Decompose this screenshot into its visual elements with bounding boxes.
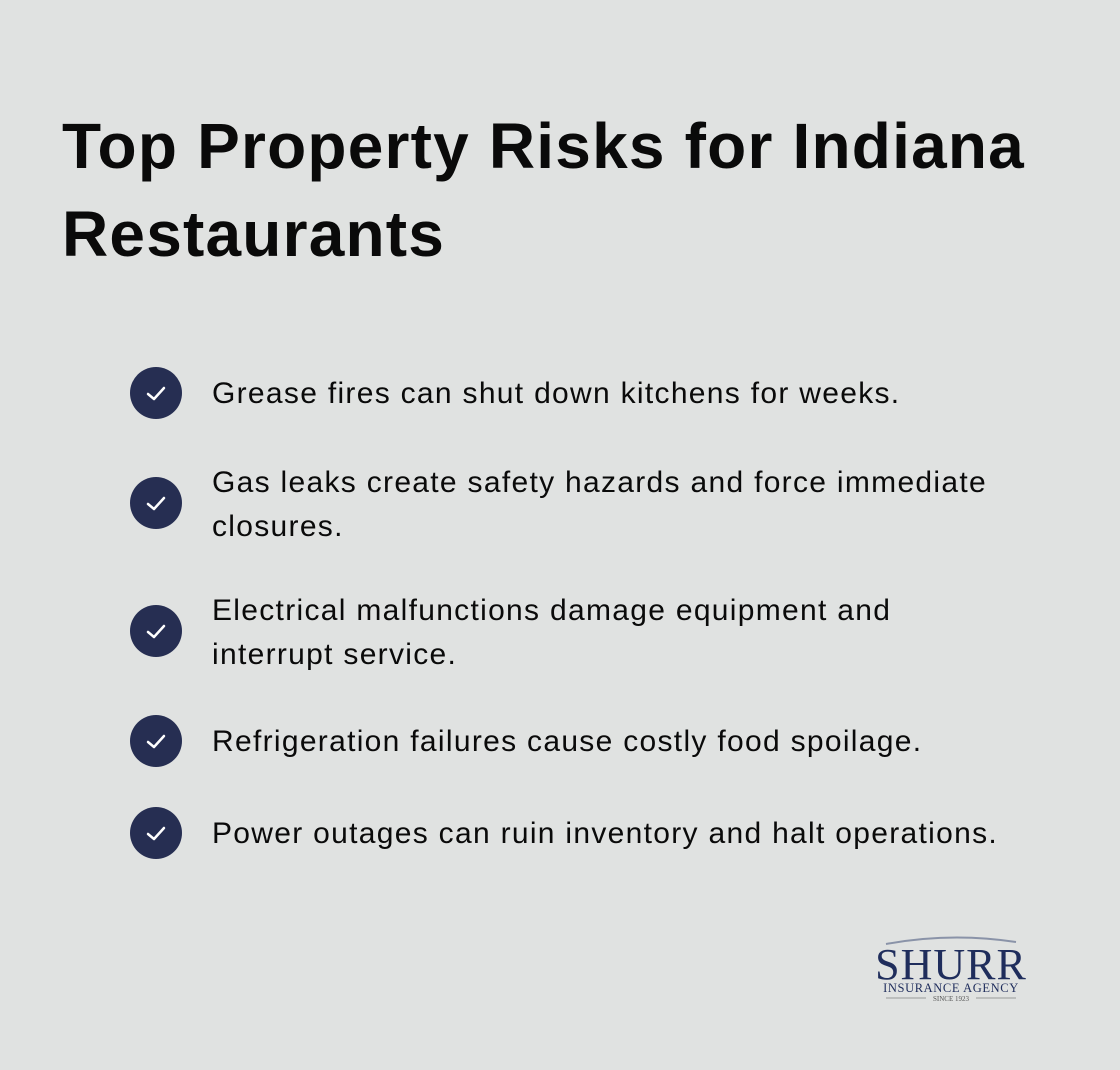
text: Grease fires can shut down kitchens for weeks. [212, 377, 900, 410]
icon: check [130, 367, 182, 419]
title [62, 110, 1025, 270]
item 5 [130, 807, 998, 859]
text: Refrigeration failures cause costly food spoilage. [212, 725, 922, 758]
item 1 [130, 367, 900, 419]
logo: SHURR [875, 940, 1027, 989]
icon: check [130, 605, 182, 657]
text: interrupt service. [212, 638, 457, 671]
title: Top Property Risks for Indiana [62, 110, 1025, 182]
item 2 [130, 466, 987, 543]
text: Electrical malfunctions damage equipment and [212, 594, 891, 627]
icon: check [130, 715, 182, 767]
item 3 [130, 594, 891, 671]
text [212, 466, 987, 543]
text [212, 594, 891, 671]
title: Restaurants [62, 198, 445, 270]
text: Gas leaks create safety hazards and force immediate [212, 466, 987, 499]
logo: INSURANCE AGENCY [883, 981, 1019, 995]
icon: check [130, 477, 182, 529]
text: closures. [212, 510, 344, 543]
text: Power outages can ruin inventory and halt operations. [212, 817, 998, 850]
item 4 [130, 715, 922, 767]
icon: check [130, 807, 182, 859]
